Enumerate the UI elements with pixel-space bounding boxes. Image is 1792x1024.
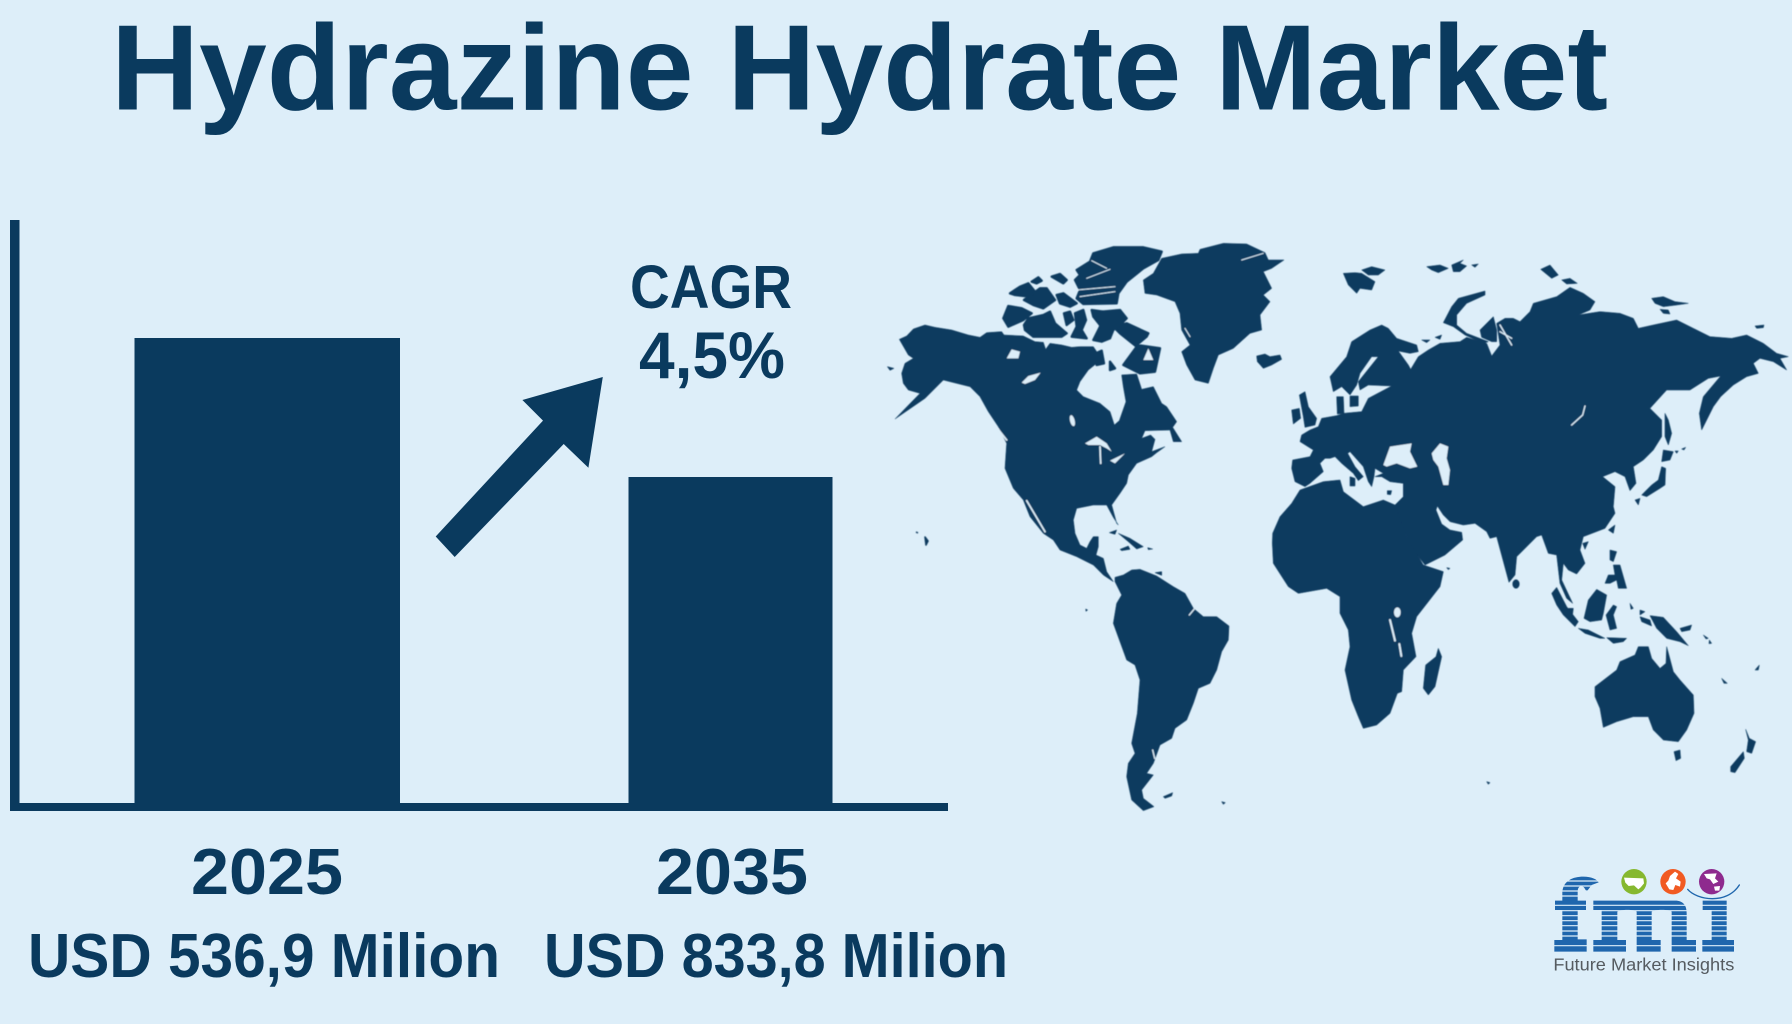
caribbean and south atlantic islands	[1086, 530, 1225, 804]
x axis	[10, 803, 948, 811]
bar: 2035	[628, 477, 832, 804]
letter m	[1593, 901, 1696, 952]
letter f	[1554, 877, 1599, 952]
icon: orange globe	[1660, 869, 1686, 894]
africa and south america	[1086, 480, 1443, 811]
arrow: growth	[436, 377, 603, 557]
year 2035: 2035	[656, 835, 808, 908]
black sea	[1383, 443, 1417, 468]
logo: Future Market Insights	[1550, 869, 1739, 974]
bar chart	[10, 220, 948, 811]
south america	[1113, 569, 1229, 811]
canadian and great lakes	[1007, 349, 1125, 463]
icon: purple globe	[1699, 869, 1724, 894]
north america mainland	[895, 325, 1182, 582]
hawaii	[916, 532, 928, 545]
rift lakes	[1390, 620, 1401, 656]
letter stripes	[1550, 881, 1737, 946]
eurasia mainland	[1292, 287, 1788, 603]
letter i	[1702, 901, 1734, 952]
africa	[1272, 480, 1443, 728]
swoosh	[1688, 885, 1739, 899]
title: Hydrazine Hydrate Market	[111, 0, 1608, 136]
north america and arctic	[887, 243, 1317, 582]
label: 2025 value	[28, 835, 500, 991]
sri lanka	[1513, 580, 1519, 588]
southeast asia islands	[1552, 525, 1627, 643]
logo caption: Future Market Insights	[1553, 954, 1734, 974]
iceland	[1257, 354, 1282, 368]
CAGR label: CAGR	[630, 253, 792, 321]
small ocean islands	[1447, 568, 1490, 784]
y axis	[10, 220, 20, 811]
greenland fjords	[1185, 253, 1263, 337]
asia pacific and oceania	[1447, 525, 1759, 784]
bar: 2025	[134, 338, 400, 804]
CAGR value: 4,5%	[639, 318, 785, 392]
eurasia	[1292, 260, 1788, 603]
year 2025: 2025	[191, 835, 343, 908]
aleutian island	[887, 367, 894, 370]
tasmania	[1674, 750, 1681, 761]
african lakes	[1394, 607, 1401, 617]
ireland and britain	[1292, 392, 1317, 427]
australia	[1595, 647, 1694, 742]
patagonia inlets	[1153, 609, 1194, 758]
arctic islands	[1003, 247, 1162, 373]
value 2025: USD 536,9 Milion	[28, 922, 500, 991]
greenland	[1143, 243, 1284, 383]
caspian sea	[1432, 443, 1450, 485]
arctic and pacific islands	[1337, 260, 1764, 505]
madagascar	[1423, 648, 1442, 695]
new zealand	[1731, 729, 1756, 773]
callout: CAGR	[630, 253, 792, 392]
label: 2035 value	[544, 835, 1008, 991]
lake baikal and ob estuary	[1500, 325, 1585, 425]
lake and gulf channels	[998, 429, 1101, 532]
world map	[887, 243, 1788, 811]
icon: green globe	[1621, 869, 1647, 894]
new guinea and melanesia	[1630, 603, 1759, 683]
arctic channels	[1077, 261, 1115, 297]
value 2035: USD 833,8 Milion	[544, 922, 1008, 991]
baffin lake	[1143, 348, 1153, 360]
fmi letters	[1554, 877, 1734, 952]
